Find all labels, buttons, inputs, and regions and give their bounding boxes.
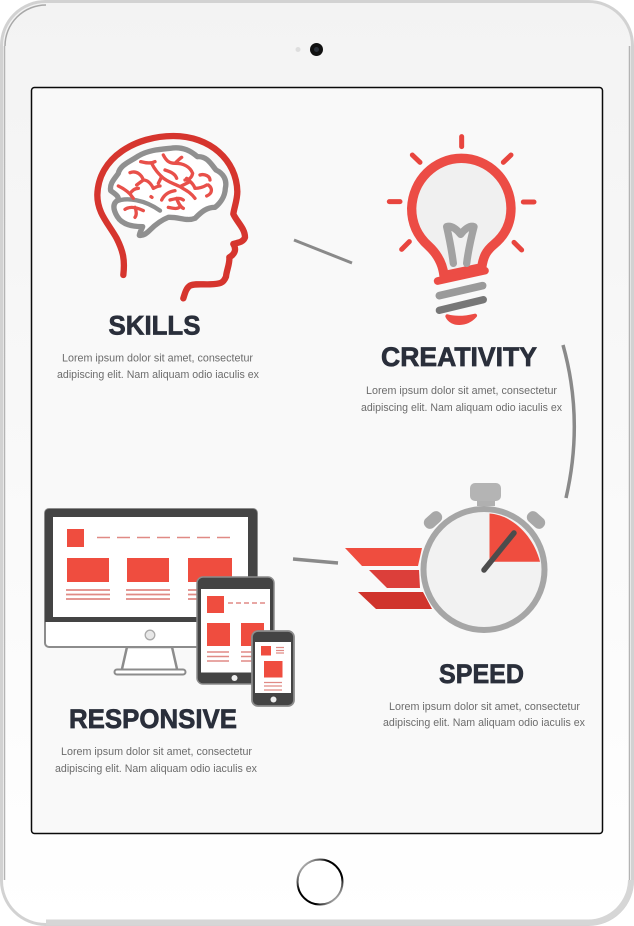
filament bbox=[447, 226, 474, 263]
side knobs bbox=[422, 509, 547, 531]
bulb tip bbox=[447, 316, 475, 323]
head outline bbox=[97, 136, 245, 298]
text: responsive description: Lorem ipsum dolor sit amet, consectetur bbox=[61, 746, 252, 758]
brain veins bbox=[118, 155, 211, 217]
top button bbox=[470, 483, 501, 506]
connector: speed to responsive bbox=[293, 559, 338, 563]
rays bbox=[389, 137, 534, 250]
icon: stopwatch bbox=[345, 483, 547, 630]
text: responsive description bbox=[55, 746, 257, 775]
text: creativity description: Lorem ipsum dolor sit amet, consectetur bbox=[366, 385, 557, 397]
text: responsive description: adipiscing elit. Nam aliquam odio iaculis ex bbox=[55, 763, 257, 775]
text: creativity description: adipiscing elit. Nam aliquam odio iaculis ex bbox=[361, 402, 562, 414]
home button bbox=[298, 860, 342, 904]
desktop monitor bbox=[45, 509, 257, 674]
watch face bbox=[424, 509, 544, 630]
bulb glass bbox=[412, 158, 511, 276]
bulb base rim bbox=[438, 271, 485, 281]
brain fold bbox=[116, 199, 160, 211]
screw threads bbox=[439, 286, 483, 296]
connector: creativity to speed bbox=[563, 345, 574, 498]
tablet device bbox=[197, 577, 274, 684]
heading: skills: SKILLS bbox=[108, 310, 200, 340]
text: skills description: adipiscing elit. Nam aliquam odio iaculis ex bbox=[57, 369, 259, 381]
front camera bbox=[296, 43, 323, 56]
red sector bbox=[490, 514, 540, 562]
heading: creativity: CREATIVITY bbox=[381, 342, 537, 372]
phone device bbox=[252, 631, 294, 706]
screen bbox=[32, 88, 602, 834]
icon: responsive devices bbox=[45, 509, 294, 706]
hand bbox=[484, 533, 514, 570]
text: speed description bbox=[383, 701, 585, 729]
text: speed description: Lorem ipsum dolor sit amet, consectetur bbox=[389, 701, 580, 713]
brain outline bbox=[110, 148, 226, 235]
text: skills description bbox=[57, 352, 259, 381]
heading: speed: SPEED bbox=[439, 659, 524, 689]
heading: responsive: RESPONSIVE bbox=[69, 704, 237, 734]
connector: skills to creativity bbox=[294, 240, 352, 263]
icon: head with brain bbox=[97, 136, 245, 298]
text: skills description: Lorem ipsum dolor sit amet, consectetur bbox=[62, 352, 253, 364]
speed stripes bbox=[345, 548, 432, 609]
text: speed description: adipiscing elit. Nam aliquam odio iaculis ex bbox=[383, 717, 585, 729]
text: creativity description bbox=[361, 385, 562, 414]
icon: light bulb bbox=[389, 137, 534, 323]
